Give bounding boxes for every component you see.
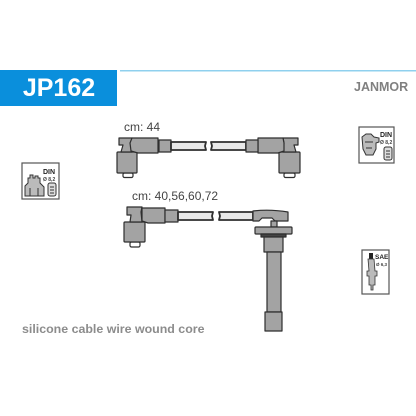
label: cable lengths: cm: 40,56,60,72 [132,189,218,203]
left connector [124,207,178,247]
icon: SAE: SAE [375,254,389,261]
icon: DIN left [22,163,59,199]
cable 1 [117,138,300,178]
header badge [0,70,117,106]
header badge: JP162 [23,74,95,102]
icon: DIN left: DIN [43,169,55,176]
icon: SAE [362,250,389,294]
icon: DIN left: Ø 8,2 [43,177,55,183]
header rule [120,70,416,72]
left connector [117,138,171,178]
icon: DIN right: Ø 8,2 [380,140,392,146]
spark plug connector [253,210,292,331]
icon: SAE: Ø 6,3 [376,262,388,267]
cable 2 [124,207,292,331]
footer note: silicone cable wire wound core [22,322,205,336]
left wire section [178,212,213,220]
icon: DIN right [359,127,394,163]
left wire section [171,142,206,150]
right wire section [211,142,246,150]
icon: DIN right: DIN [380,132,392,139]
right connector [246,138,300,178]
label: cable length 44: cm: 44 [124,120,160,134]
right wire section [219,212,253,220]
brand name: JANMOR [354,80,408,94]
